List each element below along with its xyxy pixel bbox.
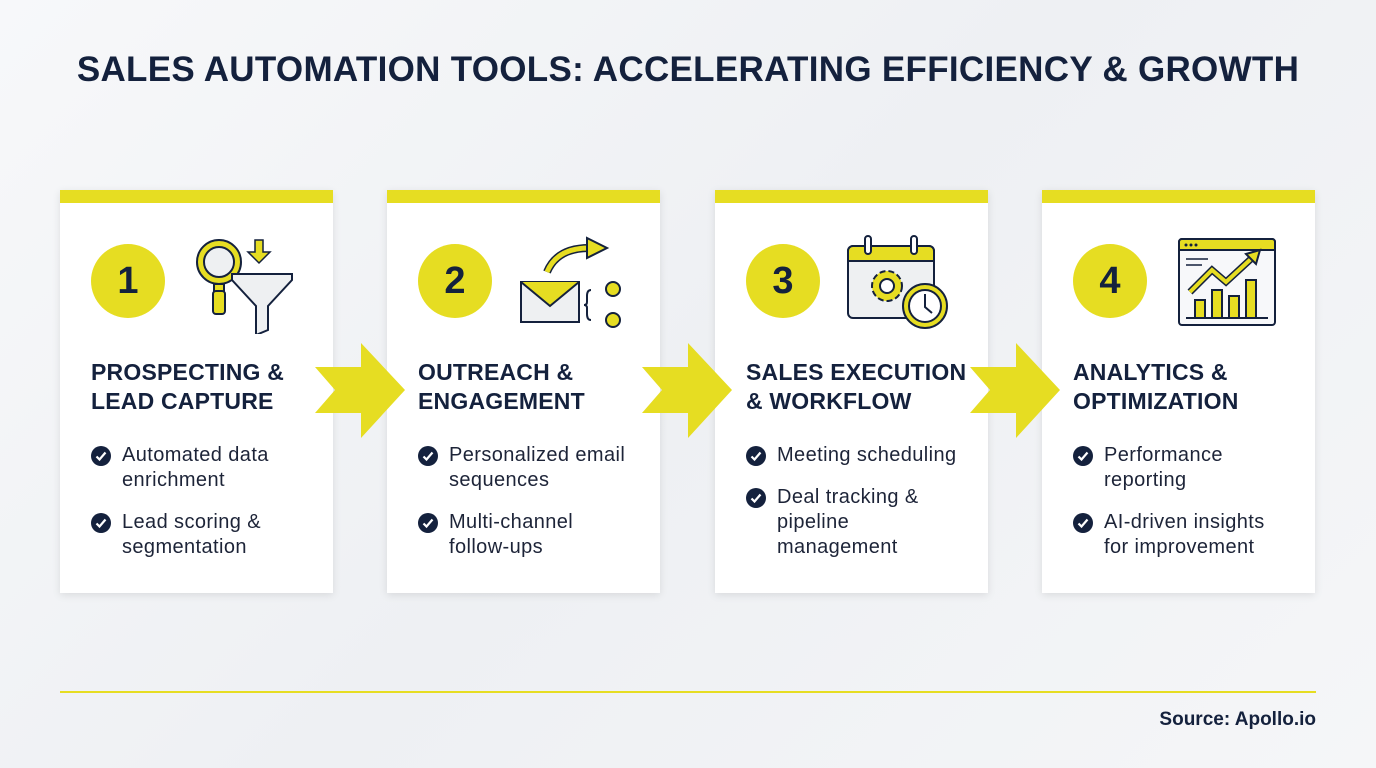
heading: & WORKFLOW: [746, 388, 912, 414]
arrow 3: [970, 343, 1060, 438]
bullet list: management: [777, 536, 898, 558]
bullet list: [1073, 444, 1265, 558]
heading: ENGAGEMENT: [418, 388, 585, 414]
heading: [746, 359, 966, 414]
panel: outreach: [387, 190, 660, 593]
bullet list: Multi‑channel follow‑ups: [449, 511, 573, 558]
heading: ANALYTICS &: [1073, 359, 1228, 385]
panel: analytics: [1042, 190, 1315, 593]
arrow 2: [642, 343, 732, 438]
number badge 2: 2: [444, 260, 466, 302]
source: Source: Apollo.io: [1159, 709, 1316, 730]
bullet list: [746, 444, 957, 558]
icon: email with arrow: [520, 236, 621, 328]
heading: [1073, 359, 1239, 414]
bullet list: Personalized email sequences: [449, 444, 625, 491]
heading: OPTIMIZATION: [1073, 388, 1239, 414]
bullet list: AI-driven insights: [1104, 511, 1265, 533]
bullet list: [91, 444, 269, 558]
heading: SALES EXECUTION: [746, 359, 966, 385]
number badge 2: [418, 244, 492, 318]
bullet list: Deal tracking &: [777, 486, 919, 508]
heading: LEAD CAPTURE: [91, 388, 274, 414]
number badge 3: 3: [772, 260, 794, 302]
heading: [418, 359, 585, 414]
icon: dashboard chart: [1178, 238, 1276, 326]
number badge 1: 1: [117, 260, 139, 302]
bullet list: Lead scoring & segmentation: [122, 511, 261, 558]
number badge 1: [91, 244, 165, 318]
bullet list: reporting: [1104, 469, 1187, 491]
arrow 1: [315, 343, 405, 438]
icon: magnifier and funnel: [196, 239, 293, 334]
panel: prospecting: [60, 190, 333, 593]
number badge 4: [1073, 244, 1147, 318]
bullet list: Performance: [1104, 444, 1223, 466]
heading: OUTREACH &: [418, 359, 573, 385]
heading: PROSPECTING &: [91, 359, 284, 385]
icon: calendar gear clock: [847, 235, 948, 329]
title: SALES AUTOMATION TOOLS: ACCELERATING EFFICIENCY & GROWTH: [77, 50, 1299, 89]
bullet list: Automated data enrichment: [122, 444, 269, 491]
panel: execution: [715, 190, 988, 593]
number badge 3: [746, 244, 820, 318]
number badge 4: 4: [1099, 260, 1121, 302]
heading: [91, 359, 284, 414]
bullet list: [418, 444, 625, 558]
bullet list: pipeline: [777, 511, 849, 533]
bullet list: Meeting scheduling: [777, 444, 957, 466]
bullet list: for improvement: [1104, 536, 1254, 558]
